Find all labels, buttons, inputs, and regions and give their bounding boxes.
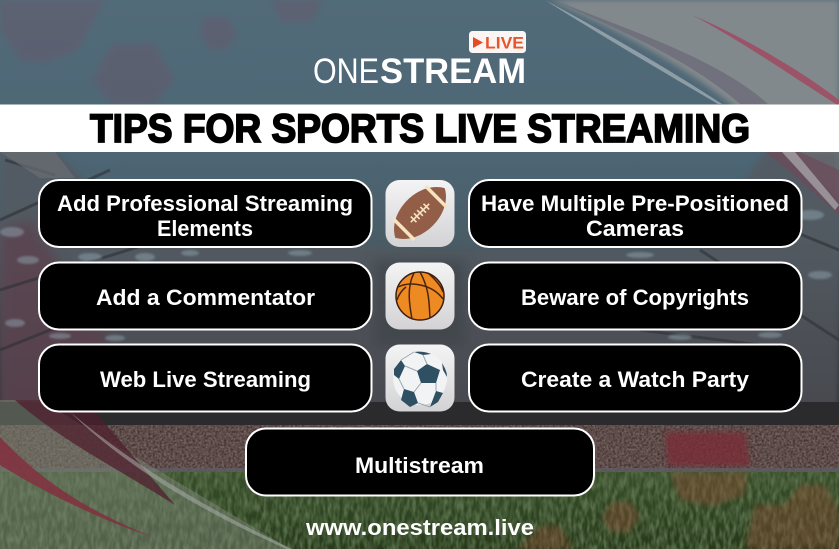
swooshes bbox=[553, 0, 768, 104]
footer url: www.onestream.live bbox=[305, 515, 534, 540]
logo: OneStream Live: STREAM bbox=[380, 52, 526, 91]
tip: have multiple pre-positioned cameras bbox=[469, 180, 802, 247]
tip: multistream: Multistream bbox=[355, 453, 484, 478]
tip: add a commentator bbox=[39, 262, 372, 330]
tip: add professional streaming elements bbox=[39, 180, 372, 247]
tip: add professional streaming elements: Add Professional Streaming bbox=[57, 191, 353, 216]
tip: create a watch party bbox=[469, 344, 802, 412]
logo: OneStream Live bbox=[313, 31, 526, 91]
tip: web live streaming: Web Live Streaming bbox=[100, 367, 311, 392]
icon: american football bbox=[383, 176, 457, 250]
tip: beware of copyrights bbox=[469, 262, 802, 330]
hexagon tints bbox=[0, 0, 323, 104]
tip: have multiple pre-positioned cameras: Cameras bbox=[586, 216, 684, 241]
roof struts bbox=[0, 160, 839, 350]
logo wordmark: ONE bbox=[313, 52, 379, 91]
icon: soccer ball bbox=[386, 344, 454, 412]
tip: have multiple pre-positioned cameras: Have Multiple Pre-Positioned bbox=[481, 191, 789, 216]
logo live badge: LIVE bbox=[485, 34, 524, 52]
tip: beware of copyrights: Beware of Copyrights bbox=[521, 285, 749, 310]
icon: basketball bbox=[386, 262, 454, 330]
tip: add professional streaming elements: Elements bbox=[157, 216, 253, 241]
tip: multistream bbox=[246, 428, 594, 496]
tip: web live streaming bbox=[39, 344, 372, 412]
title banner: TIPS FOR SPORTS LIVE STREAMING bbox=[90, 107, 750, 151]
logo live badge bbox=[469, 31, 526, 53]
tip: add a commentator: Add a Commentator bbox=[96, 285, 315, 310]
tip: create a watch party: Create a Watch Party bbox=[521, 367, 750, 392]
